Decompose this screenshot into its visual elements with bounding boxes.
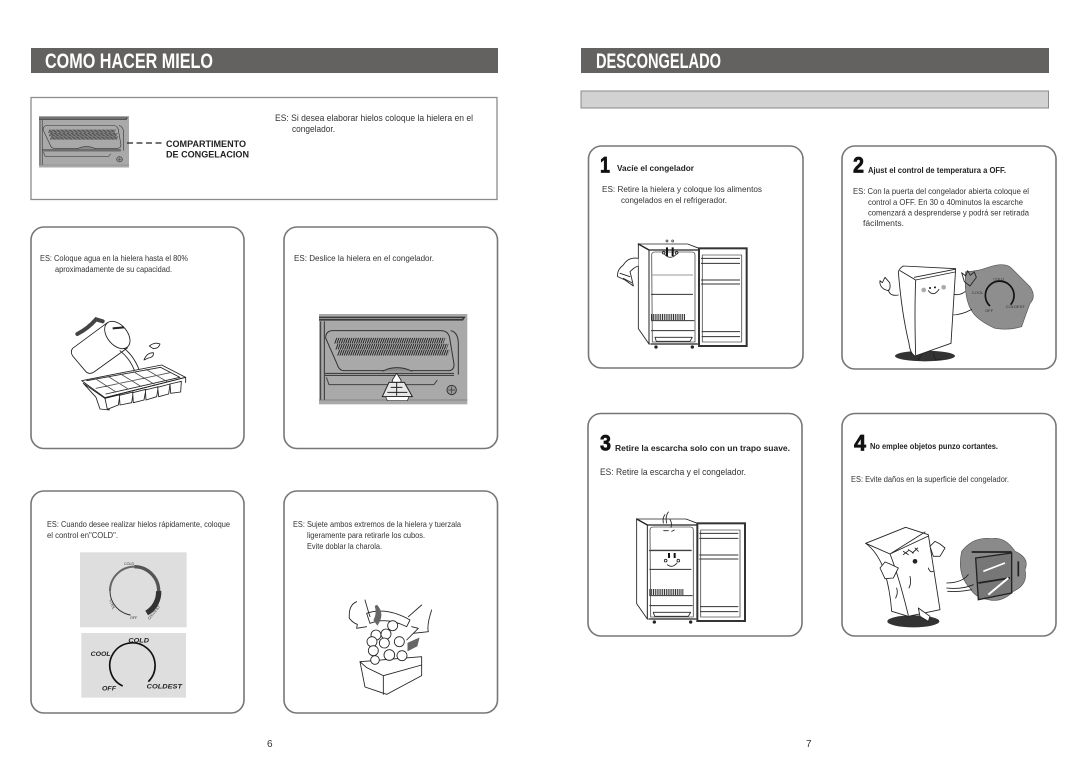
step number 3: 3 [600, 430, 611, 456]
step text: ES: Retire la escarcha y el congelador. [600, 467, 746, 478]
step text: ES: Con la puerta del congelador abierta coloque el [853, 186, 1029, 196]
step heading: No emplee objetos punzo cortantes. [870, 441, 998, 451]
instruction text: ES: Coloque agua en la hielera hasta el 80% [40, 253, 188, 263]
icon: open refrigerator character [618, 240, 747, 349]
dial photo: COOL [108, 599, 116, 610]
panel: fill the ice tray [31, 227, 244, 448]
dial photo: COLD [124, 562, 135, 566]
icon: pitcher pouring into ice tray [71, 317, 186, 410]
step text [602, 184, 762, 205]
panel: cold control dial [31, 491, 244, 713]
instruction text [293, 519, 461, 551]
intro text: ES: Si desea elaborar hielos coloque la hielera en el [275, 113, 473, 124]
dial photo: OFF [130, 616, 138, 620]
instruction text: ES: Cuando desee realizar hielos rápidamente, coloque [47, 519, 230, 529]
icon: refrigerator character with dial bubble [880, 265, 1033, 361]
icon: refrigerator character with dial bubble: COLD [993, 278, 1004, 282]
panel: step 1 empty the freezer [588, 146, 803, 368]
left section title bar [31, 48, 498, 73]
left section title bar: COMO HACER MIELO [45, 50, 213, 73]
panel: slide tray into freezer [284, 227, 498, 448]
step text [853, 186, 1029, 228]
panel: step 2 set control to off [842, 146, 1056, 369]
panel: twist the tray [284, 491, 498, 713]
icon: refrigerator character with dial bubble: COOL [972, 291, 983, 295]
dial diagram: COLDEST [147, 684, 183, 691]
step number 1: 1 [600, 152, 610, 178]
step text: ES: Retire la hielera y coloque los alimentos [602, 184, 762, 194]
icon: scared refrigerator and freezer with tools [866, 527, 1026, 627]
icon: refrigerator character with dial bubble: OFF [985, 309, 994, 313]
step text: ES: Evite daños en la superficie del congelador. [851, 474, 1009, 484]
dial diagram: OFF [102, 686, 117, 693]
instruction text: ES: Deslice la hielera en el congelador. [294, 253, 434, 263]
intro text: congelador. [292, 124, 335, 135]
panel: step 3 remove frost with cloth [588, 414, 802, 636]
instruction text [47, 519, 230, 540]
page number 7: 7 [806, 739, 812, 750]
dial photo [80, 552, 187, 627]
label: compartment [166, 139, 249, 160]
step heading: Vacíe el congelador [617, 163, 695, 173]
step heading: Ajust el control de temperatura a OFF. [868, 165, 1006, 175]
icon: open refrigerator with frost and face [637, 512, 745, 624]
panel: step 4 no sharp objects [842, 414, 1056, 636]
step text: congelados en el refrigerador. [621, 195, 727, 205]
chart: dial photo and dial diagram [80, 552, 187, 698]
step number 4: 4 [854, 430, 867, 456]
label: compartment: COMPARTIMENTO [166, 139, 246, 149]
dashed leader line [127, 142, 165, 144]
page number 6: 6 [267, 739, 273, 750]
step text: fácilments. [863, 218, 904, 228]
step heading: Retire la escarcha solo con un trapo suave. [615, 443, 790, 453]
step text: control a OFF. En 30 o 40minutos la escarche [868, 197, 1023, 207]
icon: hands twisting tray over box [349, 600, 432, 694]
dial diagram: COLD [128, 637, 149, 644]
instruction text [40, 253, 188, 274]
icon: freezer with tray and arrow [319, 314, 467, 404]
instruction text: el control en"COLD". [47, 530, 118, 540]
panel: freezer compartment intro [31, 98, 497, 200]
step number 2: 2 [853, 152, 864, 178]
instruction text: Evite doblar la charola. [307, 541, 382, 551]
dial photo: COLDEST [147, 604, 162, 621]
instruction text: aproximadamente de su capacidad. [55, 264, 172, 274]
right section title bar: DESCONGELADO [596, 50, 721, 73]
dial diagram: COOL [91, 651, 111, 658]
intro text [275, 113, 473, 135]
instruction text: ligeramente para retirarle los cubos. [307, 530, 425, 540]
label: compartment: DE CONGELACION [166, 150, 249, 160]
right section title bar [581, 48, 1049, 73]
instruction text: ES: Sujete ambos extremos de la hielera y tuerzala [293, 519, 461, 529]
icon: freezer compartment photo [39, 116, 129, 167]
empty grey subtitle bar [581, 91, 1048, 108]
dial diagram [81, 633, 186, 698]
step text: comenzará a desprenderse y podrá ser retirada [868, 208, 1029, 218]
icon: refrigerator character with dial bubble: COLDEST [1006, 305, 1026, 309]
